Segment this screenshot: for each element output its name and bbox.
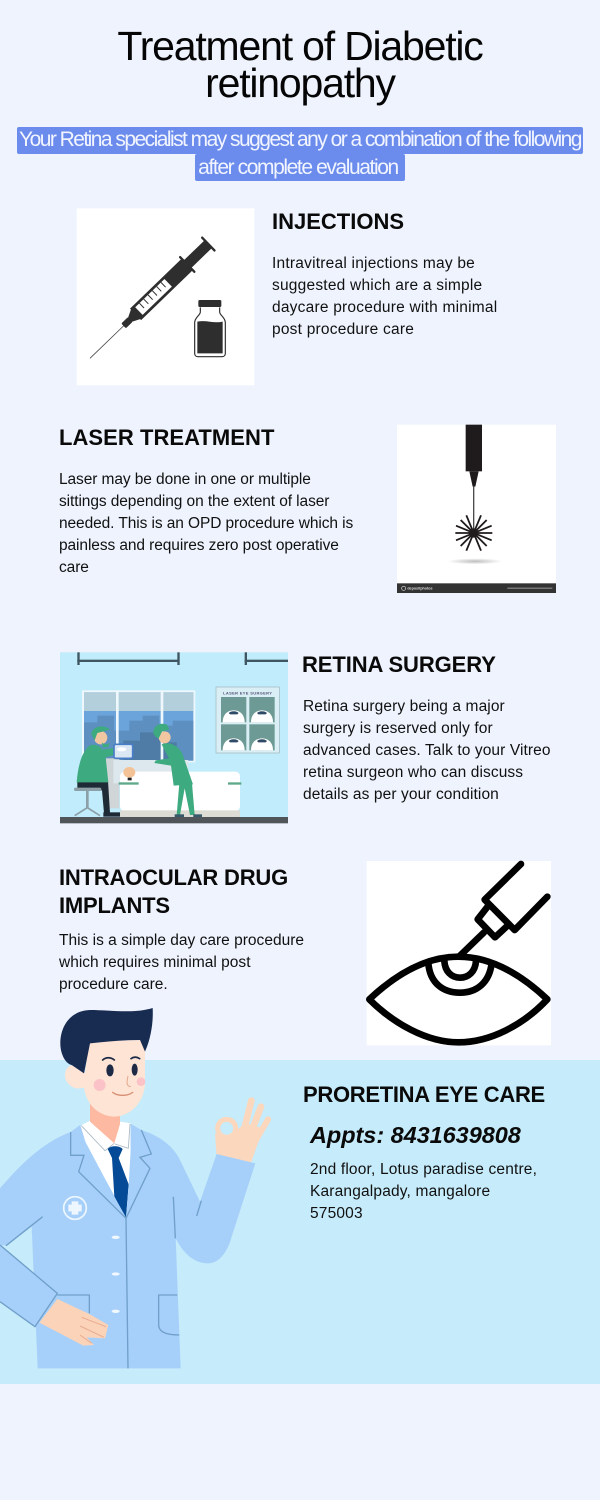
text: injections: Intravitreal injections may be (272, 255, 475, 272)
seated doctor (74, 726, 120, 817)
subtitle highlight: Your Retina specialist may suggest any or a combination of the following (19, 128, 581, 151)
heading: intraocular drug implants: IMPLANTS (59, 893, 170, 918)
neck (90, 1103, 120, 1143)
icon: laser beam: depositphotos (407, 587, 433, 591)
heading: retina surgery: RETINA SURGERY (302, 652, 496, 677)
heading: intraocular drug implants (59, 865, 288, 918)
illustration: retina surgery room: LASER EYE SURGERY (223, 690, 272, 695)
lower hand (39, 1299, 108, 1346)
text: retina surgery: Retina surgery being a major (303, 698, 505, 715)
icon: laser beam (397, 424, 556, 593)
tie (108, 1146, 129, 1217)
subtitle highlight: after complete evaluation (198, 156, 398, 179)
collar (81, 1124, 130, 1151)
subtitle highlight (17, 127, 583, 181)
text: retina surgery: retina surgeon who can discuss (303, 764, 523, 781)
title: retinopathy (205, 60, 395, 106)
coat body and raised arm (0, 1123, 255, 1368)
illustration: retina surgery room (60, 652, 288, 824)
icon: syringe and vial (76, 208, 254, 386)
title (117, 23, 483, 106)
text: intraocular drug implants (59, 932, 304, 993)
text: laser treatment: sittings depending on the extent of laser (59, 493, 329, 510)
text: injections (272, 255, 497, 338)
text: intraocular drug implants: procedure care. (59, 976, 168, 993)
text: injections: daycare procedure with minimal (272, 299, 497, 316)
heading: proretina eye care: PRORETINA EYE CARE (303, 1082, 545, 1107)
heading: laser treatment: LASER TREATMENT (59, 425, 274, 450)
address (310, 1161, 537, 1222)
left arm (0, 1245, 57, 1327)
address: 575003 (310, 1205, 363, 1222)
footer band (0, 1060, 600, 1384)
text: intraocular drug implants: which requires minimal post (59, 954, 251, 971)
text: retina surgery: details as per your condition (303, 786, 499, 803)
text: retina surgery: surgery is reserved only for (303, 720, 493, 737)
text: laser treatment: needed. This is an OPD procedure which is (59, 515, 353, 532)
text: laser treatment: Laser may be done in one or multiple (59, 471, 311, 488)
appointment phone: Appts: 8431639808 (310, 1122, 521, 1148)
text: intraocular drug implants: This is a simple day care procedure (59, 932, 304, 949)
text: retina surgery (303, 698, 551, 803)
text: laser treatment: care (59, 559, 89, 576)
title: Treatment of Diabetic (117, 23, 483, 69)
text: injections: post procedure care (272, 321, 414, 338)
text: retina surgery: advanced cases. Talk to your Vitreo (303, 742, 551, 759)
standing doctor (153, 724, 202, 817)
text: laser treatment (59, 471, 353, 576)
icon: eye with implant injector (366, 860, 551, 1046)
illustration: doctor (0, 1008, 271, 1368)
address: 2nd floor, Lotus paradise centre, (310, 1161, 537, 1178)
buttons (112, 1236, 120, 1313)
heading: intraocular drug implants: INTRAOCULAR DRUG (59, 865, 288, 890)
text: injections: suggested which are a simple (272, 277, 482, 294)
address: Karangalpady, mangalore (310, 1183, 490, 1200)
coat seams (6, 1130, 201, 1368)
heading: injections: INJECTIONS (272, 209, 404, 234)
hand ok gesture (215, 1101, 268, 1163)
lapels (71, 1124, 151, 1218)
shirt (80, 1107, 131, 1217)
coat badge (64, 1197, 86, 1219)
head (60, 1008, 153, 1117)
text: laser treatment: painless and requires zero post operative (59, 537, 339, 554)
